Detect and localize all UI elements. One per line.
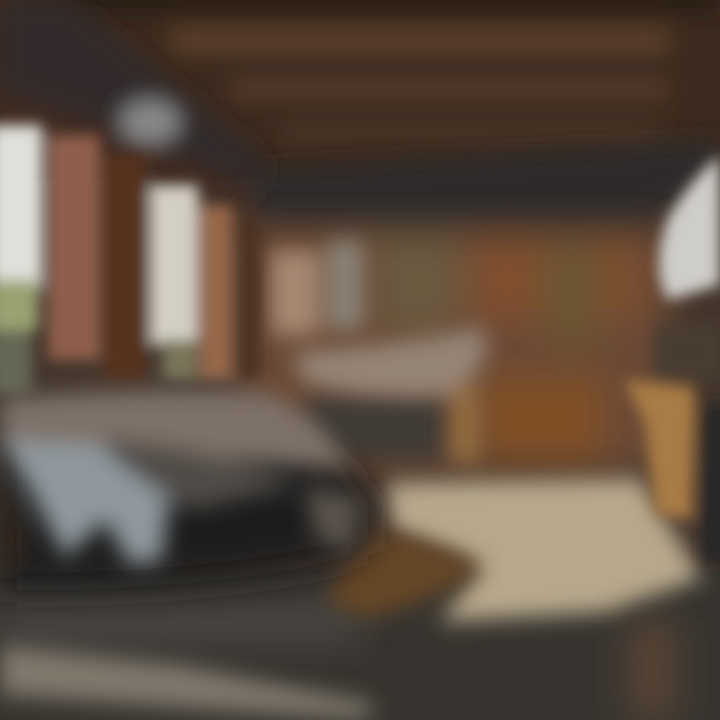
top-left dark beam [0, 0, 265, 210]
dark band under ceiling [250, 140, 720, 222]
bed: bedding and dark base [0, 390, 368, 590]
floor [0, 478, 720, 720]
left windows and pillars [0, 125, 260, 395]
wooden post at right [625, 325, 720, 565]
ceiling: wooden beams [0, 0, 720, 180]
sofa shape in background [295, 328, 486, 463]
white shape at right [659, 155, 720, 300]
rug [325, 530, 482, 618]
back wall [240, 230, 670, 470]
